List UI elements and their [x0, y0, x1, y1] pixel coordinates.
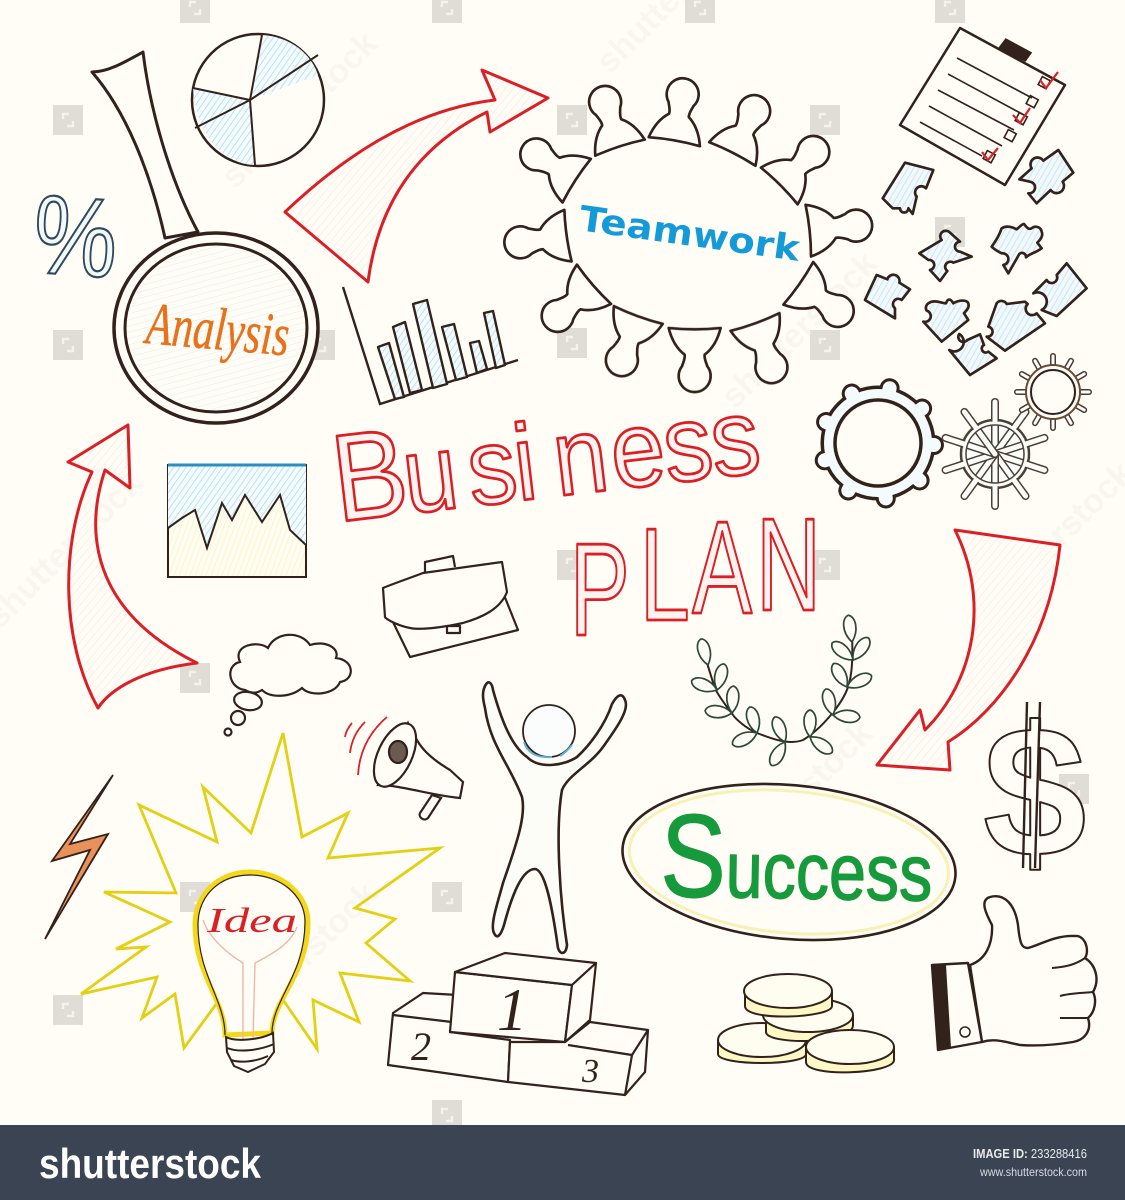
arrow: to success	[877, 530, 1060, 770]
icon: percent sign: %	[29, 171, 122, 302]
watermark tiles: shutterstock	[709, 714, 880, 886]
footer url: www.shutterstock.com	[979, 1165, 1087, 1179]
icon: lightning bolt	[45, 775, 113, 939]
icon: briefcase	[383, 556, 518, 657]
icon: magnifying glass with Analysis	[92, 52, 318, 423]
arrow: to teamwork	[285, 70, 548, 282]
footer logo: shutterstock	[39, 1140, 262, 1187]
icon: gears	[820, 356, 1089, 506]
icon: puzzle pieces	[865, 150, 1087, 375]
icon: checklist clipboard	[900, 28, 1065, 185]
big gear	[820, 386, 936, 500]
line chart panel	[168, 465, 306, 577]
label: Analysis: Analysis	[141, 290, 292, 368]
podium numbers: 1	[497, 977, 527, 1043]
icon: thought cloud	[224, 635, 351, 736]
icon: dollar sign: $	[983, 689, 1086, 896]
burst	[81, 733, 440, 1049]
title: Business: B	[325, 401, 415, 548]
icon: podium	[388, 953, 648, 1095]
icon: winner figure	[483, 682, 626, 953]
icon: thumbs up	[932, 896, 1096, 1050]
arrow: back to analysis	[68, 425, 197, 708]
image id: IMAGE ID: 233288416	[973, 1146, 1087, 1161]
label: Idea: Idea	[206, 901, 297, 940]
footer bar	[0, 1125, 1125, 1200]
bar chart	[343, 287, 518, 404]
icon: megaphone	[345, 717, 463, 819]
icon: coins	[718, 974, 894, 1072]
icon: pie chart	[192, 34, 324, 166]
watermark tiles: shutterstock	[214, 24, 385, 196]
podium numbers: 3	[581, 1053, 599, 1090]
title: PLAN: PLAN	[570, 491, 821, 663]
small gear	[1017, 356, 1089, 428]
title: Business: usiness	[396, 375, 766, 537]
label: Success: Success	[660, 790, 934, 927]
teamwork circle of pawns	[501, 74, 875, 392]
label: Teamwork: Teamwork	[577, 199, 803, 270]
podium numbers	[411, 977, 599, 1090]
watermark tiles: shutterstock	[214, 874, 385, 1046]
bulb	[195, 872, 308, 1035]
Success oval	[616, 771, 962, 953]
podium numbers: 2	[411, 1024, 431, 1069]
icon: lightbulb with burst	[81, 733, 440, 1072]
ship wheel gear	[946, 402, 1044, 506]
watermark tiles: shutterstock	[714, 244, 885, 416]
icon: laurel wreath	[690, 614, 874, 768]
